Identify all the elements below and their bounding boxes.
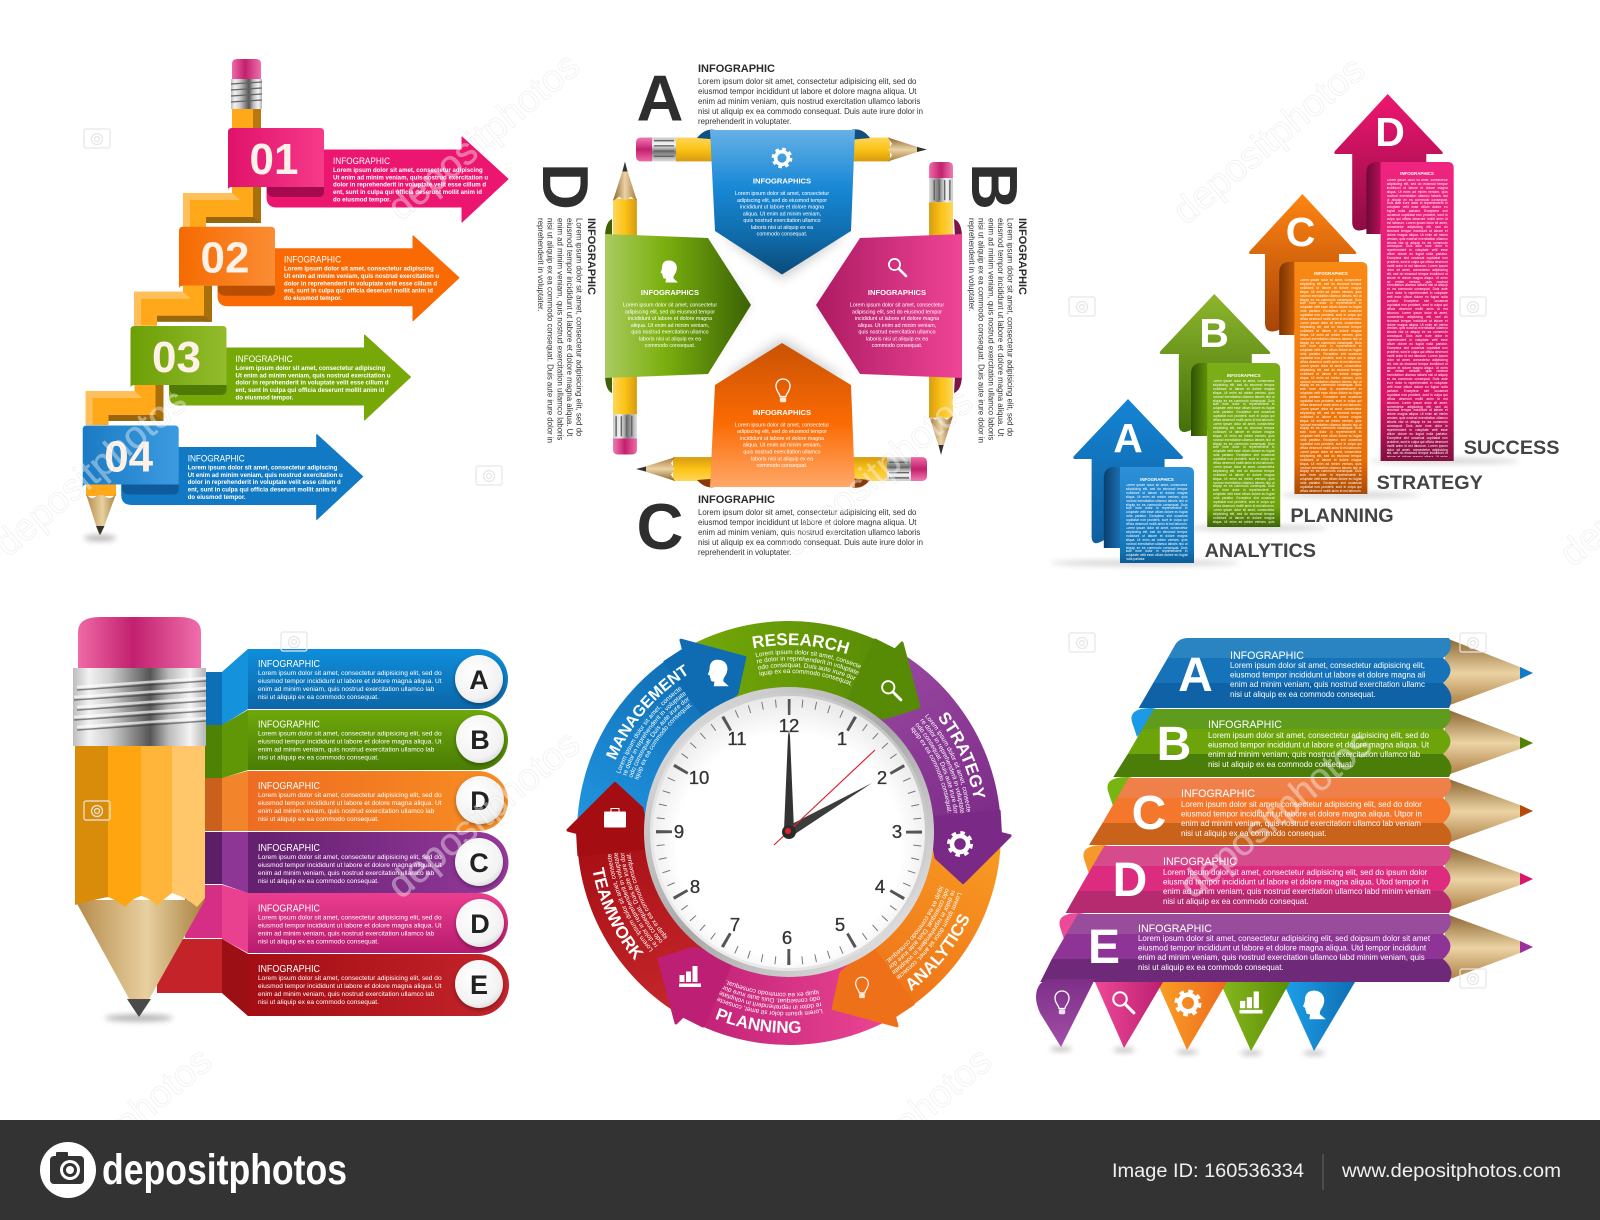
ribbon: orange [710,343,855,487]
clock numerals: 10 [689,767,709,788]
logo wordmark: depositphotos [102,1146,347,1194]
bar D pink: eiusmod tempor incididunt ut labore et dolore magna aliqua. Ut [258,922,442,930]
row D: nisi ut aliquip ex ea commodo consequat. [1163,897,1309,906]
letter D with rotated text: D [529,163,602,210]
row D: INFOGRAPHIC [1163,856,1237,868]
letter C with text: INFOGRAPHIC [698,494,775,506]
row C: nisi ut aliquip ex ea commodo consequat. [1181,829,1327,838]
minute ticks [660,703,918,961]
row 01: 01 [250,135,298,184]
letter B with rotated text: INFOGRAPHIC [1016,218,1028,295]
row C: C [1132,787,1166,840]
row 01: ent, sunt in culpa qui officia deserunt mollit anim id [333,189,482,196]
bar A: Lorem ipsum dolor sit amet, consectetur adipisicing elit, sed do [258,670,442,677]
row B: enim ad minim veniam, quis nostrud exercitation ullamco lab [1208,750,1421,759]
bar D orange: eiusmod tempor incididunt ut labore et dolore magna aliqua. Ut [258,800,442,807]
segment: research: Lorem ipsum dolor sit amet, consecte [756,650,861,668]
pin: magnifier [1095,982,1163,1048]
bar A: nisi ut aliquip ex ea commodo consequat. [258,694,379,701]
row B: B [1157,718,1191,771]
pencil shadow [105,1014,173,1022]
row 03: Ut enim ad minim veniam, quis nostrud exercitation u [236,372,391,379]
row B: eiusmod tempor incididunt ut labore et dolore magna aliqua. Ut [1208,741,1430,750]
arrow A: A [1113,415,1143,461]
segment: strategy: odo consequat. Duis aute irure dor [916,723,958,814]
bar C purple: INFOGRAPHIC [258,843,320,854]
letter A with text: reprehenderit in voluptater. [698,117,791,126]
row 02: 02 [201,234,249,283]
ribbon: orange: aliqua. Ut enim ad minim veniam, [743,443,821,449]
clock numerals: 12 [779,715,799,736]
segment: planning: Lorem ipsum dolor sit amet, consecte [717,998,822,1016]
bar E [248,954,509,1016]
row E [1040,914,1533,982]
row E: nisi ut aliquip ex ea commodo consequat. [1138,963,1284,972]
ribbon: pink: aliqua. Ut enim ad minim veniam, [858,323,936,329]
watermarks: depositphotos [380,723,588,907]
ribbon: orange: commodo consequat. [757,463,807,469]
bar C purple: C [469,848,489,878]
pencil zigzag body [86,187,261,425]
ribbon: blue: laboris nisi ut aliquip ex ea [751,225,813,231]
segment: planning: re dolor in reprehenderit in voluptate [720,992,822,1010]
pin: person [1283,982,1355,1051]
ribbon: blue: incididunt ut labore et dolore magna [740,205,824,211]
letter B with rotated text: B [958,163,1031,210]
letter D with rotated text: nisi ut aliquip ex ea commodo consequat. Duis aute irure dolor in [546,218,555,443]
row C: INFOGRAPHIC [1181,788,1255,800]
row A: nisi ut aliquip ex ea commodo consequat. [1230,690,1376,699]
letter C with text: Lorem ipsum dolor sit amet, consectetur adipisicing elit, sed do [698,508,916,517]
segment: strategy [910,712,986,857]
pin: gear [1157,982,1227,1050]
divider [1322,1154,1324,1190]
bar B: eiusmod tempor incididunt ut labore et dolore magna aliqua. Ut [258,738,442,746]
letter B with rotated text: eiusmod tempor incididunt ut labore et dolore magna aliqua. Ut [996,218,1005,437]
bar E: nisi ut aliquip ex ea commodo consequat. [258,999,379,1006]
letter C with text: eiusmod tempor incididunt ut labore et dolore magna aliqua. Ut [698,518,917,527]
row 03: ent, sunt in culpa qui officia deserunt mollit anim id [236,387,385,394]
pin: bulb [1036,979,1095,1047]
bar B: nisi ut aliquip ex ea commodo consequat. [258,754,379,762]
row B [1107,709,1533,806]
ribbon: orange: laboris nisi ut aliquip ex ea [751,456,813,462]
segment: analytics [855,886,969,998]
ribbon: pink [816,234,962,378]
logo icon [40,1142,96,1198]
panel: numbered pencil staircase [83,59,508,541]
segment: planning [679,966,822,1034]
row 04: dolor in reprehenderit in voluptate velit esse cillum d [188,479,341,486]
letter B with rotated text: reprehenderit in voluptater. [967,218,976,311]
row D: D [1113,854,1147,907]
segment: teamwork: iquip ex ea commodo consequat. [626,853,668,940]
segment: research: iquip ex ea commodo consequat. [759,670,852,686]
arrow A [1073,399,1194,563]
bar C purple: enim ad minim veniam, quis nostrud exercitation ullamco lab [258,870,435,877]
row 03: Lorem ipsum dolor sit amet, consectetur adipiscing [236,365,385,372]
ribbon: blue: INFOGRAPHICS [753,177,811,186]
bar D pink: enim ad minim veniam, quis nostrud exercitation ullamco lab [258,930,435,938]
bar E: eiusmod tempor incididunt ut labore et dolore magna aliqua. Ut [258,983,442,990]
row 01: Ut enim ad minim veniam, quis nostrud exercitation u [333,174,488,181]
ribbon: blue: commodo consequat. [757,232,807,238]
segment: teamwork: odo consequat. Duis aute irure dor [620,852,662,943]
segment: planning: iquip ex ea commodo consequat. [726,980,819,996]
segment: research: re dolor in reprehenderit in voluptate [756,656,858,674]
letter C with text: enim ad minim veniam, quis nostrud exercitation ullamco laboris [698,528,920,537]
letter A with text: A [637,62,683,134]
arrow D: INFOGRAPHICS [1400,171,1434,176]
row 01: INFOGRAPHIC [333,156,390,167]
letter D with rotated text: Lorem ipsum dolor sit amet, consectetur adipisicing elit, sed do [575,218,584,436]
bar B: INFOGRAPHIC [258,720,320,730]
clock numerals: 9 [674,821,684,842]
ribbon: green [605,234,751,378]
row 03: INFOGRAPHIC [236,354,293,365]
row C: Lorem ipsum dolor sit amet, consectetur adipisicing elit, sed do dolor [1181,800,1422,809]
segment: analytics: Lorem ipsum dolor sit amet, consecte [896,892,962,979]
bar D orange: enim ad minim veniam, quis nostrud exercitation ullamco lab [258,808,435,815]
clock numerals: 5 [835,914,845,935]
ribbon: orange: Lorem ipsum dolor sit amet, consectetur [735,422,829,428]
panel: big pencil with option bars [73,617,509,1022]
segment: analytics: odo consequat. Duis aute irure dor [889,888,948,969]
letter D with rotated text: eiusmod tempor incididunt ut labore et dolore magna aliqua. Ut [565,218,574,437]
bar C purple: Lorem ipsum dolor sit amet, consectetur adipisicing elit, sed do [258,854,442,861]
letter A with text: nisi ut aliquip ex ea commodo consequat. Duis aute irure dolor in [698,107,923,116]
segment: analytics: ANALYTICS [907,914,969,992]
stage labels: ANALYTICS [1205,540,1316,562]
row 03: dolor in reprehenderit in voluptate velit esse cillum d [236,380,389,387]
ribbon: green: INFOGRAPHICS [641,288,699,297]
hour ticks [664,707,914,957]
pin shadows [1050,1047,1325,1055]
bar D pink: Lorem ipsum dolor sit amet, consectetur adipisicing elit, sed do [258,914,442,922]
segment: teamwork: re dolor in reprehenderit in voluptate [614,852,658,948]
bar E: E [470,970,488,1000]
ribbon: pink: laboris nisi ut aliquip ex ea [866,336,928,342]
bar A: enim ad minim veniam, quis nostrud exercitation ullamco lab [258,686,435,693]
row A: A [1178,649,1213,702]
row 04: INFOGRAPHIC [188,454,245,464]
ribbon: green: commodo consequat. [645,343,695,349]
row 04: do eiusmod tempor. [188,494,246,501]
segment: teamwork: Lorem ipsum dolor sit amet, consecte [608,854,653,952]
clock numerals: 11 [727,728,747,749]
ribbon: pink: quis nostrud exercitation ullamco [858,330,936,336]
pin: chart [1220,982,1290,1051]
bar D orange: nisi ut aliquip ex ea commodo consequat. [258,816,379,823]
row E: enim ad minim veniam, quis nostrud exercitation ullamco labd minim veniam, quis [1138,953,1425,962]
row 02: INFOGRAPHIC [284,255,341,266]
arrow A: Lorem ipsum dolor sit amet, consectetur adipisicing elit, sed do eiusmod tempor incididunt ut labore et dolore magna aliqua. Ut enim ad minim veniam, quis nostrud exercitation ullamco laboris nisi ut aliquip ex ea commodo consequat. Duis aute irure dolor in reprehenderit in voluptate velit esse cillum dolore eu fugiat nulla pariatur. Excepteur sint occaecat cupidatat non proident, sunt in culpa qui officia deserunt mollit anim id est laborum. Lorem ipsum dolor sit amet, consectetur adipisicing elit, sed do eiusmod tempor incididunt ut labore et dolore magna aliqua. Ut enim ad minim veniam, quis nostrud exercitation ullamco laboris nisi ut aliquip ex ea commodo consequat. Duis aute irure dolor in reprehenderit in voluptate velit esse cillum dolore eu fugiat nulla pariatur. [1126,484,1188,561]
row 03: do eiusmod tempor. [236,394,294,401]
ribbon: green: aliqua. Ut enim ad minim veniam, [631,323,709,329]
segment: research: RESEARCH [752,633,850,654]
row D [1059,846,1533,942]
stage labels: SUCCESS [1464,437,1559,459]
letter D with rotated text: enim ad minim veniam, quis nostrud exercitation ullamco laboris [555,218,564,440]
row C: eiusmod tempor incididunt ut labore et dolore magna aliqua. Utpor in [1181,810,1422,819]
segment: analytics: iquip ex ea commodo consequat. [886,886,944,962]
image id: Image ID: 160536334 [1112,1161,1304,1182]
ribbon: green: adipiscing elit, sed do eiusmod tempor [625,309,715,315]
panel: coloured pencil rows [1036,638,1533,1055]
segment: research [752,633,902,702]
ribbon: orange: quis nostrud exercitation ullamco [743,449,821,455]
clock numerals: 1 [837,728,847,749]
website: www.depositphotos.com [1341,1161,1561,1182]
ribbon: blue: quis nostrud exercitation ullamco [743,218,821,224]
bar B [248,710,508,770]
pencil tip [84,480,116,541]
arrow C: C [1286,209,1315,255]
row A: Lorem ipsum dolor sit amet, consectetur adipisicing elit, [1230,661,1425,670]
row 02: Ut enim ad minim veniam, quis nostrud exercitation u [284,273,439,280]
bar B: Lorem ipsum dolor sit amet, consectetur adipisicing elit, sed do [258,730,442,738]
letter C with text [637,490,923,563]
bar B: enim ad minim veniam, quis nostrud exercitation ullamco lab [258,746,435,754]
segment: management: iquip ex ea commodo consequat. [634,704,692,780]
segment: teamwork: TEAMWORK [593,867,644,961]
row 02 [179,227,459,321]
row 02: do eiusmod tempor. [284,295,342,302]
row B: Lorem ipsum dolor sit amet, consectetur adipisicing elit, sed do [1208,731,1429,740]
ribbon: blue [710,130,855,274]
row 02: dolor in reprehenderit in voluptate velit esse cillum d [284,280,437,287]
watermarks: depositphotos [380,45,588,229]
bar E: enim ad minim veniam, quis nostrud exercitation ullamco lab [258,991,435,998]
ribbon: pink: incididunt ut labore et dolore magna [855,316,939,322]
footer bar [0,1120,1600,1220]
watermarks: depositphotos [12,1040,220,1220]
letter D with rotated text: INFOGRAPHIC [585,218,597,295]
watermarks: depositphotos [773,381,981,565]
letter C with text: C [637,490,683,563]
letter A with text: enim ad minim veniam, quis nostrud exercitation ullamco laboris [698,97,920,106]
pencil top with eraser [231,59,262,131]
arrow D: D [1375,109,1405,155]
clock numerals: 7 [730,914,740,935]
bar D orange: D [470,786,490,816]
segment: planning: odo consequat. Duis aute irure dor [722,986,820,1003]
bar C purple: eiusmod tempor incididunt ut labore et dolore magna aliqua. Ut [258,862,442,869]
big pencil [73,617,206,1017]
bar D pink: INFOGRAPHIC [258,904,320,914]
arrow B [1160,294,1280,527]
clock numerals: 2 [877,767,887,788]
segment: strategy: STRATEGY [939,712,986,798]
ribbon: blue: Lorem ipsum dolor sit amet, consectetur [735,191,829,197]
panel: clock with circular arrows [566,621,1012,1045]
row 03: 03 [152,333,201,382]
clock [644,687,934,977]
row E: E [1088,921,1120,974]
clock numerals: 8 [690,876,700,897]
letter A with text: Lorem ipsum dolor sit amet, consectetur adipisicing elit, sed do [698,77,916,86]
bar A: eiusmod tempor incididunt ut labore et dolore magna aliqua. Ut [258,678,442,685]
letter C with text: reprehenderit in voluptater. [698,548,791,557]
letter D with rotated text [529,163,602,443]
ring arrowheads [557,624,1021,1042]
ribbon: pink: Lorem ipsum dolor sit amet, consectetur [850,302,944,308]
strip folds behind pencil [157,649,248,1016]
ribbon: green: laboris nisi ut aliquip ex ea [639,336,701,342]
shadows [702,234,866,380]
ribbon: green: quis nostrud exercitation ullamco [631,330,709,336]
ribbon: green: incididunt ut labore et dolore magna [628,316,712,322]
clock numerals: 4 [875,876,885,897]
segment: management: re dolor in reprehenderit in voluptate [623,692,686,776]
letter A with text: eiusmod tempor incididunt ut labore et dolore magna aliqua. Ut [698,87,917,96]
row 02: Lorem ipsum dolor sit amet, consectetur adipiscing [284,266,434,273]
panel: four pencils with pentagon ribbons [529,62,1031,563]
row 04: Ut enim ad minim veniam, quis nostrud exercitation u [188,472,343,479]
segment: strategy: re dolor in reprehenderit in voluptate [920,718,964,814]
letter A with text [637,62,923,134]
stage labels: PLANNING [1290,505,1394,527]
clock numerals: 3 [892,821,902,842]
row C: enim ad minim veniam, quis nostrud exercitation ullamco lab veniam [1181,819,1421,828]
watermarks: depositphotos [1165,49,1373,233]
letter B with rotated text: nisi ut aliquip ex ea commodo consequat. Duis aute irure dolor in [977,218,986,443]
stage labels [1205,437,1559,562]
segment: teamwork [593,808,668,961]
segment: management: odo consequat. Duis aute irure dor [630,697,689,778]
row 04: Lorem ipsum dolor sit amet, consectetur adipiscing [188,464,337,472]
bar C purple [248,832,508,893]
ribbon curls [605,129,962,488]
bar D orange: INFOGRAPHIC [258,781,320,792]
letter B with rotated text: Lorem ipsum dolor sit amet, consectetur adipisicing elit, sed do [1006,218,1015,436]
ring bodies [548,621,1030,1045]
bar E: INFOGRAPHIC [258,964,320,975]
ribbon: blue: adipiscing elit, sed do eiusmod tempor [737,198,827,204]
arrow B: INFOGRAPHICS [1227,373,1261,378]
panel: growth arrows [1050,94,1559,566]
row E: INFOGRAPHIC [1138,923,1212,935]
row 02: ent, sunt in culpa qui officia deserunt mollit anim id [284,288,433,295]
letter B with rotated text: enim ad minim veniam, quis nostrud exercitation ullamco laboris [986,218,995,440]
ribbon: orange: incididunt ut labore et dolore magna [740,436,824,442]
bar D orange: Lorem ipsum dolor sit amet, consectetur adipisicing elit, sed do [258,792,442,799]
ribbon: orange: adipiscing elit, sed do eiusmod tempor [737,429,827,435]
row 04: 04 [104,432,154,482]
arrow B: B [1199,310,1229,356]
bar E: Lorem ipsum dolor sit amet, consectetur adipisicing elit, sed do [258,975,442,982]
row 03 [130,326,410,420]
ribbon: orange: INFOGRAPHICS [753,408,811,417]
row C [1083,778,1533,874]
row D: Lorem ipsum dolor sit amet, consectetur adipisicing elit, sed do ipsum dolor [1163,868,1427,877]
clock numerals: 6 [782,927,792,948]
row A: INFOGRAPHIC [1230,650,1304,662]
row 04 [83,426,363,520]
row 01: do eiusmod tempor. [333,196,391,203]
row E: Lorem ipsum dolor sit amet, consectetur adipisicing elit, sed doipsum dolor sit amet [1138,934,1430,943]
segment: planning: PLANNING [716,1008,800,1034]
segment: strategy: iquip ex ea commodo consequat. [910,726,952,813]
bar D pink [248,893,508,953]
ribbon: blue: aliqua. Ut enim ad minim veniam, [743,211,821,217]
row 01: Lorem ipsum dolor sit amet, consectetur adipiscing [333,167,483,174]
row D: eiusmod tempor incididunt ut labore et dolore magna aliqua. Utod tempor in [1163,878,1428,887]
segment: strategy: Lorem ipsum dolor sit amet, consecte [925,714,970,812]
row B: nisi ut aliquip ex ea commodo consequat. [1208,760,1354,769]
arrow C [1249,194,1367,494]
ground shadows [1050,458,1520,566]
ribbon: pink: adipiscing elit, sed do eiusmod tempor [852,309,942,315]
segment: analytics: re dolor in reprehenderit in voluptate [892,890,955,974]
letter B with rotated text [958,163,1031,443]
letter A with text: INFOGRAPHIC [698,63,775,75]
ribbon: pink: commodo consequat. [872,343,922,349]
row A: eiusmod tempor incididunt ut labore et dolore magna ali [1230,671,1426,680]
bar A: A [469,665,489,695]
watermarks: depositphotos [1172,723,1380,907]
pencil frame [613,138,953,481]
bar A: INFOGRAPHIC [258,659,320,670]
bar C purple: nisi ut aliquip ex ea commodo consequat. [258,878,379,885]
row A: enim ad minim veniam, quis nostrud exercitation ullamc [1230,680,1425,689]
bar B: B [470,725,490,755]
row D: enim ad minim veniam, quis nostrud exercitation ullamco labd minim veniam [1163,887,1431,896]
bar D pink: nisi ut aliquip ex ea commodo consequat. [258,938,379,946]
row 04: ent, sunt in culpa qui officia deserunt mollit anim id [188,486,337,494]
segment: management [606,660,729,780]
segment: management: MANAGEMENT [606,664,687,760]
row 01: dolor in reprehenderit in voluptate velit esse cillum d [333,182,486,189]
segment: research: odo consequat. Duis aute irure dor [758,663,856,680]
row B: INFOGRAPHIC [1208,719,1282,731]
arrow C: INFOGRAPHICS [1314,271,1348,276]
letter D with rotated text: reprehenderit in voluptater. [536,218,545,311]
arrow D [1334,94,1454,461]
bar D pink: D [470,909,490,939]
ribbon: pink: INFOGRAPHICS [868,288,926,297]
arrow A: INFOGRAPHICS [1140,477,1174,482]
stage labels: STRATEGY [1377,472,1483,494]
bar A [248,649,508,709]
clock hands [774,730,875,845]
row A [1131,638,1533,737]
watermarks: depositphotos [792,1040,1000,1220]
segment: management: Lorem ipsum dolor sit amet, consecte [616,687,682,774]
row 01 [228,128,508,222]
ribbon: green: Lorem ipsum dolor sit amet, consectetur [623,302,717,308]
clock numerals [674,715,902,948]
letter C with text: nisi ut aliquip ex ea commodo consequat. Duis aute irure dolor in [698,538,923,547]
bar D orange [248,771,508,831]
row E: eiusmod tempor incididunt ut labore et dolore magna aliqua. Utd tempor incididunt [1138,944,1427,953]
